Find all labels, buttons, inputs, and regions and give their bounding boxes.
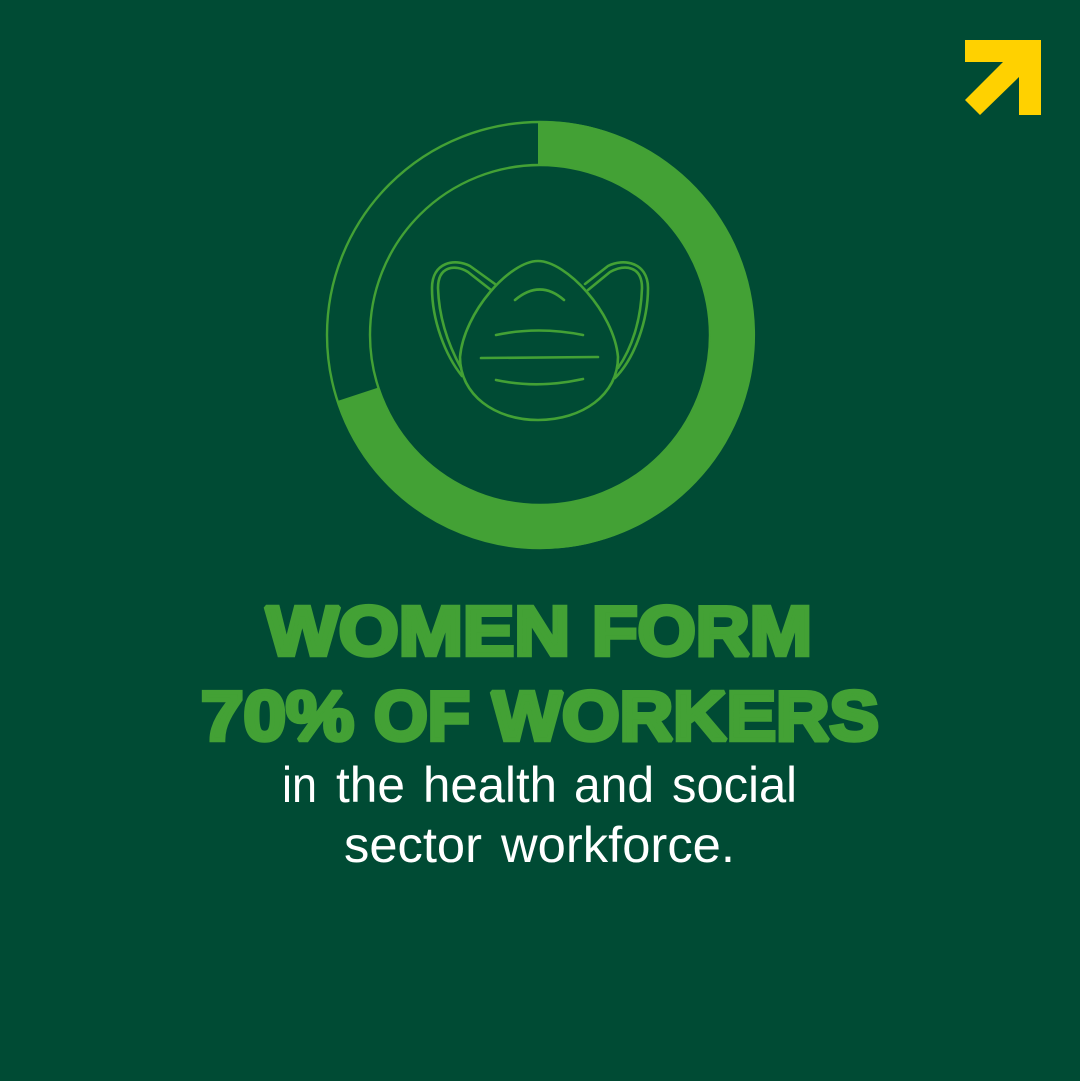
body text: sector [344,817,482,873]
heading: 70% [201,677,354,755]
body text [282,757,797,873]
body text: health [423,757,557,813]
donut chart: 70 percent [327,121,755,549]
heading [201,592,879,755]
heading: FORM [592,592,812,670]
body text: and [574,757,654,813]
icon: face mask [432,261,648,420]
heading: WOMEN [266,592,570,670]
body text: workforce. [500,817,735,873]
heading: WORKERS [492,677,879,755]
heading: OF [374,677,470,755]
body text: social [672,757,797,813]
body text: the [336,757,405,813]
body text: in [282,757,317,813]
icon: yellow arrow logo [965,40,1041,115]
